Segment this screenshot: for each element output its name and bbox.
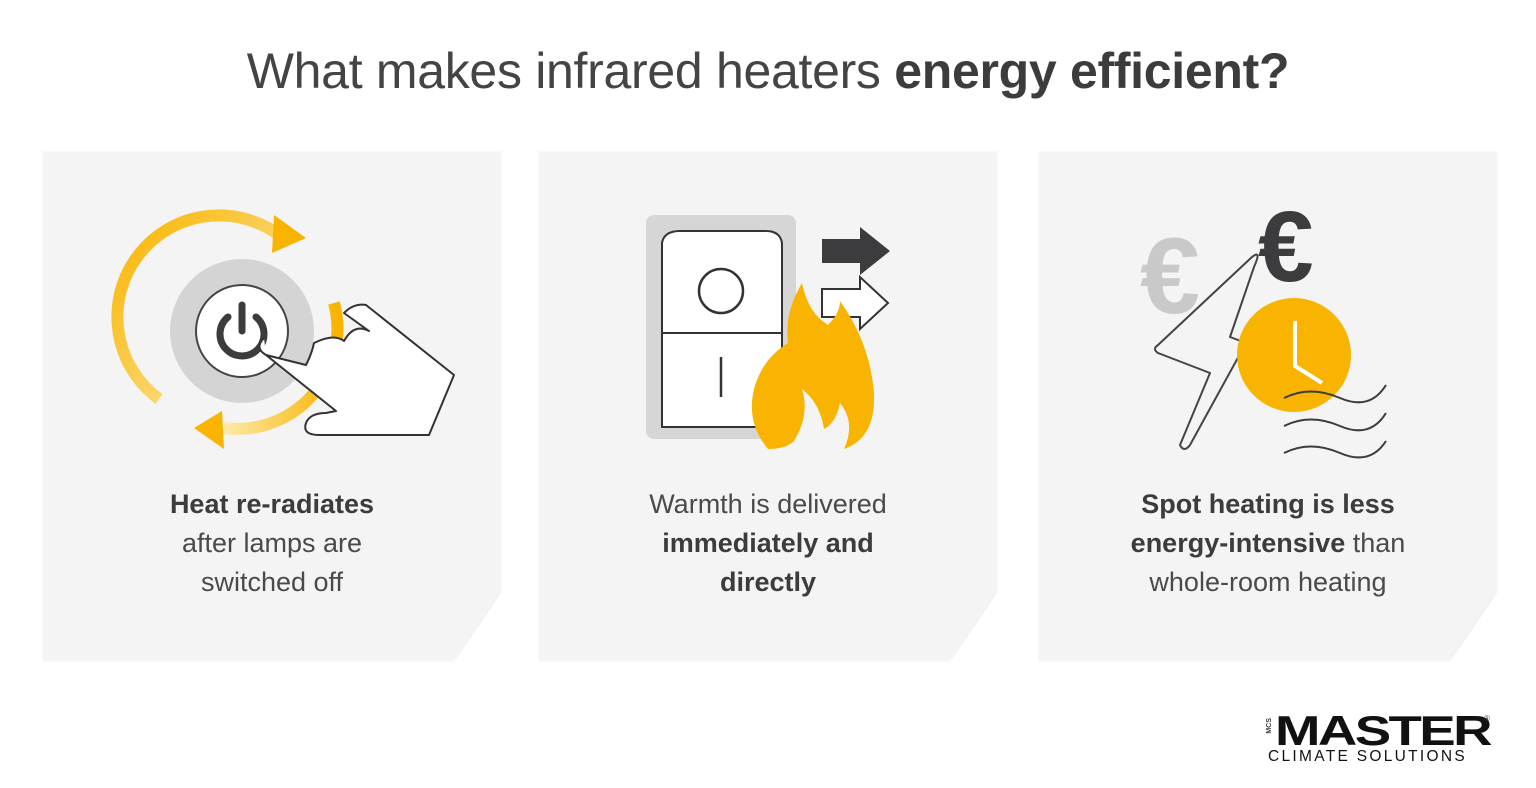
- text: spot heating: Spot heating is less: [1141, 489, 1395, 519]
- text: heat re-radiates: Heat re-radiates: [170, 489, 374, 519]
- text: spot heating: [1132, 494, 1404, 596]
- text: heat re-radiates: switched off: [201, 567, 343, 597]
- title: What makes infrared heaters energy efficient?: [247, 43, 1289, 99]
- text: heat re-radiates: after lamps are: [182, 528, 362, 558]
- text: warmth delivered: [649, 494, 885, 596]
- text: warmth delivered: Warmth is delivered: [649, 489, 887, 519]
- icon: euros, lightning, clock, waves: [1140, 211, 1387, 458]
- text: warmth delivered: immediately and: [662, 528, 874, 558]
- text: warmth delivered: directly: [720, 567, 816, 597]
- logo: Master Climate Solutions: MASTER: [1275, 707, 1490, 754]
- text: heat re-radiates: [172, 494, 373, 592]
- panel: spot heating: [1132, 211, 1404, 596]
- logo: Master Climate Solutions: MCS: [1266, 718, 1273, 734]
- text: spot heating: energy-intensive than: [1131, 528, 1405, 558]
- icon: euros, lightning, clock, waves: €: [1258, 191, 1314, 303]
- icon: power button with hand and arrows: [111, 209, 455, 449]
- panel: heat re-radiates: [111, 209, 455, 592]
- logo: Master Climate Solutions: CLIMATE SOLUTIONS: [1268, 748, 1467, 765]
- panel: warmth delivered: [646, 215, 890, 596]
- icon: euros, lightning, clock, waves: €: [1140, 215, 1200, 336]
- text: spot heating: whole-room heating: [1149, 567, 1387, 597]
- logo: Master Climate Solutions: ®: [1484, 714, 1490, 723]
- icon: switch with flame and arrows: [646, 215, 890, 449]
